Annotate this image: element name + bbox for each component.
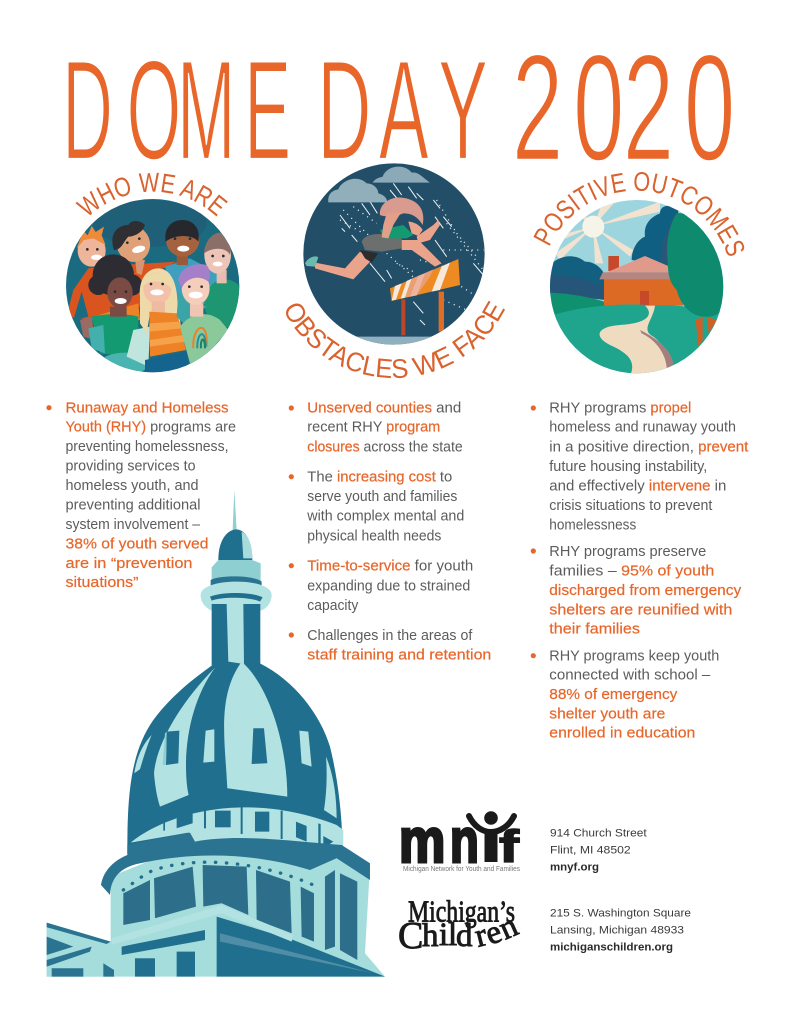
logo: mnyf: Michigan Network for Youth and Families — [403, 866, 520, 873]
title: DOME — [62, 31, 291, 189]
ground — [356, 336, 432, 345]
sun rays — [555, 200, 660, 263]
infographic page — [46, 55, 748, 977]
text column: who we are: preventing additional — [66, 498, 200, 514]
text column: obstacles we face: physical health needs — [307, 528, 441, 544]
column — [212, 604, 260, 666]
text column: who we are: 38% of youth served — [66, 536, 208, 552]
icon: person with raised arms — [469, 811, 514, 862]
hurdle — [401, 299, 405, 335]
logo: michigan's children: l — [448, 917, 457, 953]
clouds — [328, 179, 387, 202]
text column: positive outcomes: in a positive direction, prevent — [549, 440, 748, 456]
text column: positive outcomes: shelters are reunified with — [549, 602, 732, 618]
text column: positive outcomes: future housing instability, — [549, 459, 707, 475]
lower drum — [47, 843, 385, 977]
logo: mnyf: m — [399, 807, 445, 876]
text column: positive outcomes: homelessness — [549, 517, 636, 533]
spire — [233, 490, 237, 530]
base block — [217, 917, 385, 977]
drum band — [131, 807, 343, 847]
rain — [340, 183, 483, 325]
cornice — [101, 833, 370, 895]
text column: obstacles we face: Time-to-service for youth — [307, 558, 473, 574]
logo: michigan's children: h — [422, 918, 439, 954]
illustration: capitol dome — [47, 490, 385, 977]
drum panes — [123, 865, 357, 960]
text column: who we are: are in “prevention — [66, 556, 192, 572]
logo: michigan's children: d — [456, 918, 473, 954]
contact: michigan's children — [550, 908, 691, 954]
title — [62, 22, 735, 193]
text column: positive outcomes: discharged from emergency — [549, 583, 742, 599]
contact: mnyf: Flint, MI 48502 — [550, 844, 631, 856]
tree — [696, 317, 717, 347]
text column: positive outcomes: homeless and runaway youth — [549, 420, 736, 436]
text column: obstacles we face: The increasing cost to — [307, 470, 452, 486]
winding path — [600, 306, 668, 377]
logo: mnyf: n — [450, 806, 479, 876]
left wing — [47, 923, 115, 977]
text column: obstacles we face: Challenges in the areas of — [307, 628, 473, 644]
text column: obstacles we face: capacity — [307, 598, 359, 614]
cornice dots — [123, 862, 313, 890]
house — [604, 278, 676, 306]
logo: michigan's children: i — [439, 917, 448, 953]
illustration: runner jumping hurdle — [300, 160, 490, 350]
logo: michigan's children: Michigan’s — [408, 894, 515, 929]
text column: obstacles we face — [289, 400, 491, 663]
logo: mnyf: f — [499, 822, 519, 872]
contact: michigan's children: Lansing, Michigan 48933 — [550, 924, 684, 936]
heading: who we are: WHO WE ARE — [76, 172, 228, 216]
text column: obstacles we face: Unserved counties and — [307, 400, 461, 416]
text column: obstacles we face: with complex mental and — [306, 509, 464, 525]
title: 2020 — [512, 22, 735, 193]
text column: positive outcomes — [531, 400, 748, 742]
logo: michigan's children: e — [480, 914, 507, 953]
heading: obstacles we face: OBSTACLES WE FACE — [286, 300, 505, 378]
bushes — [632, 206, 678, 267]
text column: who we are — [46, 400, 236, 591]
text column: who we are: Runaway and Homeless — [66, 400, 228, 416]
title: DAY — [317, 31, 488, 190]
contact: mnyf: 914 Church Street — [550, 828, 647, 840]
text column: obstacles we face: expanding due to strained — [307, 578, 470, 594]
text column: who we are: providing services to — [66, 459, 196, 475]
text column: positive outcomes: crisis situations to prevent — [549, 498, 712, 514]
text column: positive outcomes: their families — [549, 622, 640, 638]
text column: who we are: situations” — [66, 575, 139, 591]
text column: obstacles we face: staff training and retention — [307, 647, 491, 663]
text column: positive outcomes: connected with school – — [549, 667, 711, 683]
contact: mnyf: mnyf.org — [550, 861, 599, 873]
contact: mnyf — [550, 828, 647, 873]
meadow — [554, 304, 720, 374]
dome body — [127, 663, 343, 863]
logo: michigan's children: r — [471, 917, 491, 955]
logo: michigan's children: n — [494, 908, 523, 947]
logo: michigan's children — [398, 894, 523, 957]
illustration: group of youth — [63, 197, 246, 377]
text column: who we are: homeless youth, and — [66, 478, 198, 494]
logo: michigan's children: C — [398, 915, 423, 957]
text column: obstacles we face: closures across the state — [307, 440, 463, 456]
text column: who we are: system involvement – — [66, 517, 201, 533]
runner — [315, 252, 372, 279]
illustration: house and path — [550, 200, 724, 374]
contact: michigan's children: 215 S. Washington Square — [550, 908, 691, 920]
logo: mnyf — [399, 806, 520, 876]
text column: obstacles we face: serve youth and families — [307, 489, 457, 505]
text column: positive outcomes: RHY programs propel — [549, 400, 691, 416]
lantern — [218, 529, 252, 560]
text column: positive outcomes: RHY programs preserve — [549, 544, 706, 560]
text column: obstacles we face: recent RHY program — [307, 420, 440, 436]
heading: positive outcomes: POSITIVE OUTCOMES — [533, 172, 744, 256]
text column: positive outcomes: shelter youth are — [549, 706, 665, 722]
text column: positive outcomes: and effectively intervene in — [549, 478, 726, 494]
dome windows — [166, 731, 179, 765]
contact: michigan's children: michiganschildren.org — [550, 942, 673, 954]
text column: positive outcomes: RHY programs keep youth — [549, 648, 719, 664]
text column: who we are: Youth (RHY) programs are — [66, 420, 236, 436]
text column: positive outcomes: enrolled in education — [549, 726, 695, 742]
dome light panels — [134, 662, 337, 818]
text column: positive outcomes: families – 95% of youth — [549, 563, 714, 579]
text column: positive outcomes: 88% of emergency — [549, 687, 678, 703]
text column: who we are: preventing homelessness, — [66, 439, 228, 455]
